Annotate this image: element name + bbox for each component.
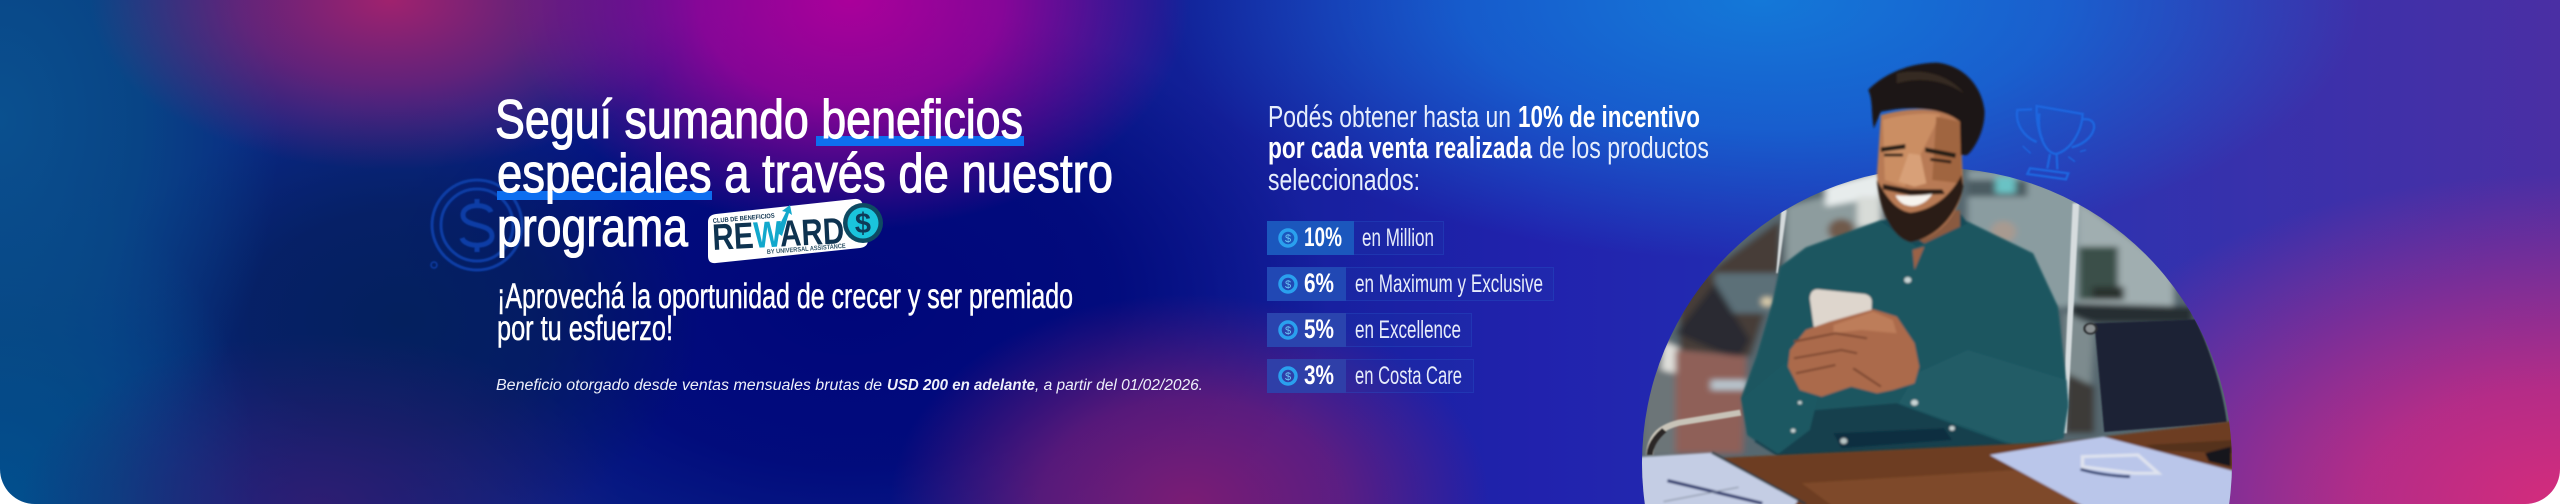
photo: smiling man with phone in circle xyxy=(1636,63,2237,504)
row: 6% en Maximum y Exclusive xyxy=(1267,267,1554,301)
underline highlights xyxy=(497,136,1024,200)
icon: dollar coin watermark xyxy=(431,180,522,270)
footnote: , a partir del 01/02/2026. xyxy=(1035,377,1203,394)
subheading: por tu esfuerzo! xyxy=(497,309,673,348)
heading xyxy=(495,88,1113,258)
man figure xyxy=(1741,63,2069,457)
subheading: ¡Aprovechá la oportunidad de crecer y ser premiado xyxy=(497,277,1073,316)
row: 10% en Million: en Million xyxy=(1362,224,1434,252)
hair xyxy=(1868,63,1985,155)
row: 3% en Costa Care: en Costa Care xyxy=(1355,362,1462,390)
beard and mouth xyxy=(1877,175,1963,242)
eyebrows and eyes xyxy=(1881,144,1905,152)
row: 10% en Million: 10% xyxy=(1304,222,1342,252)
row: 6% en Maximum y Exclusive: en Maximum y Exclusive xyxy=(1355,270,1543,298)
incentive intro text: de los productos xyxy=(1539,130,1709,165)
incentive intro text: por cada venta realizada xyxy=(1268,130,1533,165)
row: 10% en Million xyxy=(1267,221,1444,255)
footnote: USD 200 en adelante xyxy=(887,377,1035,394)
row: 5% en Excellence: 5% xyxy=(1304,314,1334,344)
logo: Rewards badge xyxy=(708,199,883,263)
incentive intro text xyxy=(1268,99,1709,197)
row: 6% en Maximum y Exclusive: 6% xyxy=(1304,268,1334,298)
row: 5% en Excellence: $ xyxy=(1285,325,1291,337)
row: 10% en Million: $ xyxy=(1285,233,1291,245)
logo: Rewards badge: BY UNIVERSAL ASSISTANCE xyxy=(767,243,846,256)
icon: trophy watermark xyxy=(2017,106,2094,179)
banner artwork xyxy=(430,61,2232,504)
subheading xyxy=(497,277,1073,348)
logo: Rewards badge: $ xyxy=(855,208,871,240)
footnote xyxy=(496,377,1203,394)
neck and face xyxy=(1918,209,1962,245)
row: 6% en Maximum y Exclusive: $ xyxy=(1285,279,1291,291)
footnote: Beneficio otorgado desde ventas mensuales brutas de xyxy=(496,377,882,394)
heading: programa xyxy=(497,196,688,258)
heading: especiales a través de nuestro xyxy=(497,142,1113,204)
phone xyxy=(1810,289,1872,333)
logo: Rewards badge: CLUB DE BENEFICIOS xyxy=(713,213,776,225)
row: 3% en Costa Care xyxy=(1267,359,1474,393)
logo: Rewards badge: REWARD xyxy=(711,210,845,258)
row: 3% en Costa Care: 3% xyxy=(1304,360,1334,390)
heading: Seguí sumando beneficios xyxy=(495,88,1023,150)
row: 3% en Costa Care: $ xyxy=(1285,371,1291,383)
row: 5% en Excellence: en Excellence xyxy=(1355,316,1461,344)
incentive intro text: 10% de incentivo xyxy=(1518,99,1700,134)
row: 5% en Excellence xyxy=(1267,313,1472,347)
incentive intro text: seleccionados: xyxy=(1268,162,1420,197)
table and papers xyxy=(1636,421,2237,504)
incentive intro text: Podés obtener hasta un xyxy=(1268,99,1511,134)
hands xyxy=(1788,309,1919,397)
